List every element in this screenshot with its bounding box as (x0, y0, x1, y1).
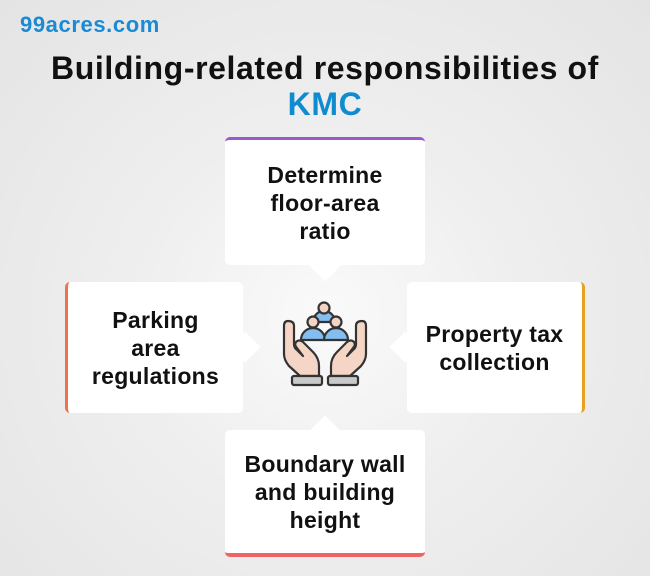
panel: top: Determine (267, 162, 383, 188)
panel: left: area (131, 334, 180, 360)
pointers (309, 250, 341, 282)
panel: right: Property tax (426, 320, 563, 346)
panel: left: Parking (112, 306, 199, 332)
panel: left (65, 282, 243, 413)
logo: 99acres.com (20, 12, 160, 37)
panel: top (225, 137, 425, 265)
title: KMC (288, 86, 362, 122)
panel: bottom: Boundary wall (244, 450, 406, 476)
title (51, 50, 599, 122)
panel: bottom: height (290, 506, 360, 532)
icon: hands holding people (282, 301, 368, 386)
panel: bottom: and building (255, 478, 395, 504)
panel: right (407, 282, 585, 413)
panel: top: ratio (299, 218, 351, 244)
panel: left: regulations (92, 362, 219, 388)
title: Building-related responsibilities of (51, 50, 599, 86)
panel: right: collection (439, 348, 550, 374)
panel: bottom (225, 430, 425, 557)
panel: top: floor-area (270, 190, 380, 216)
